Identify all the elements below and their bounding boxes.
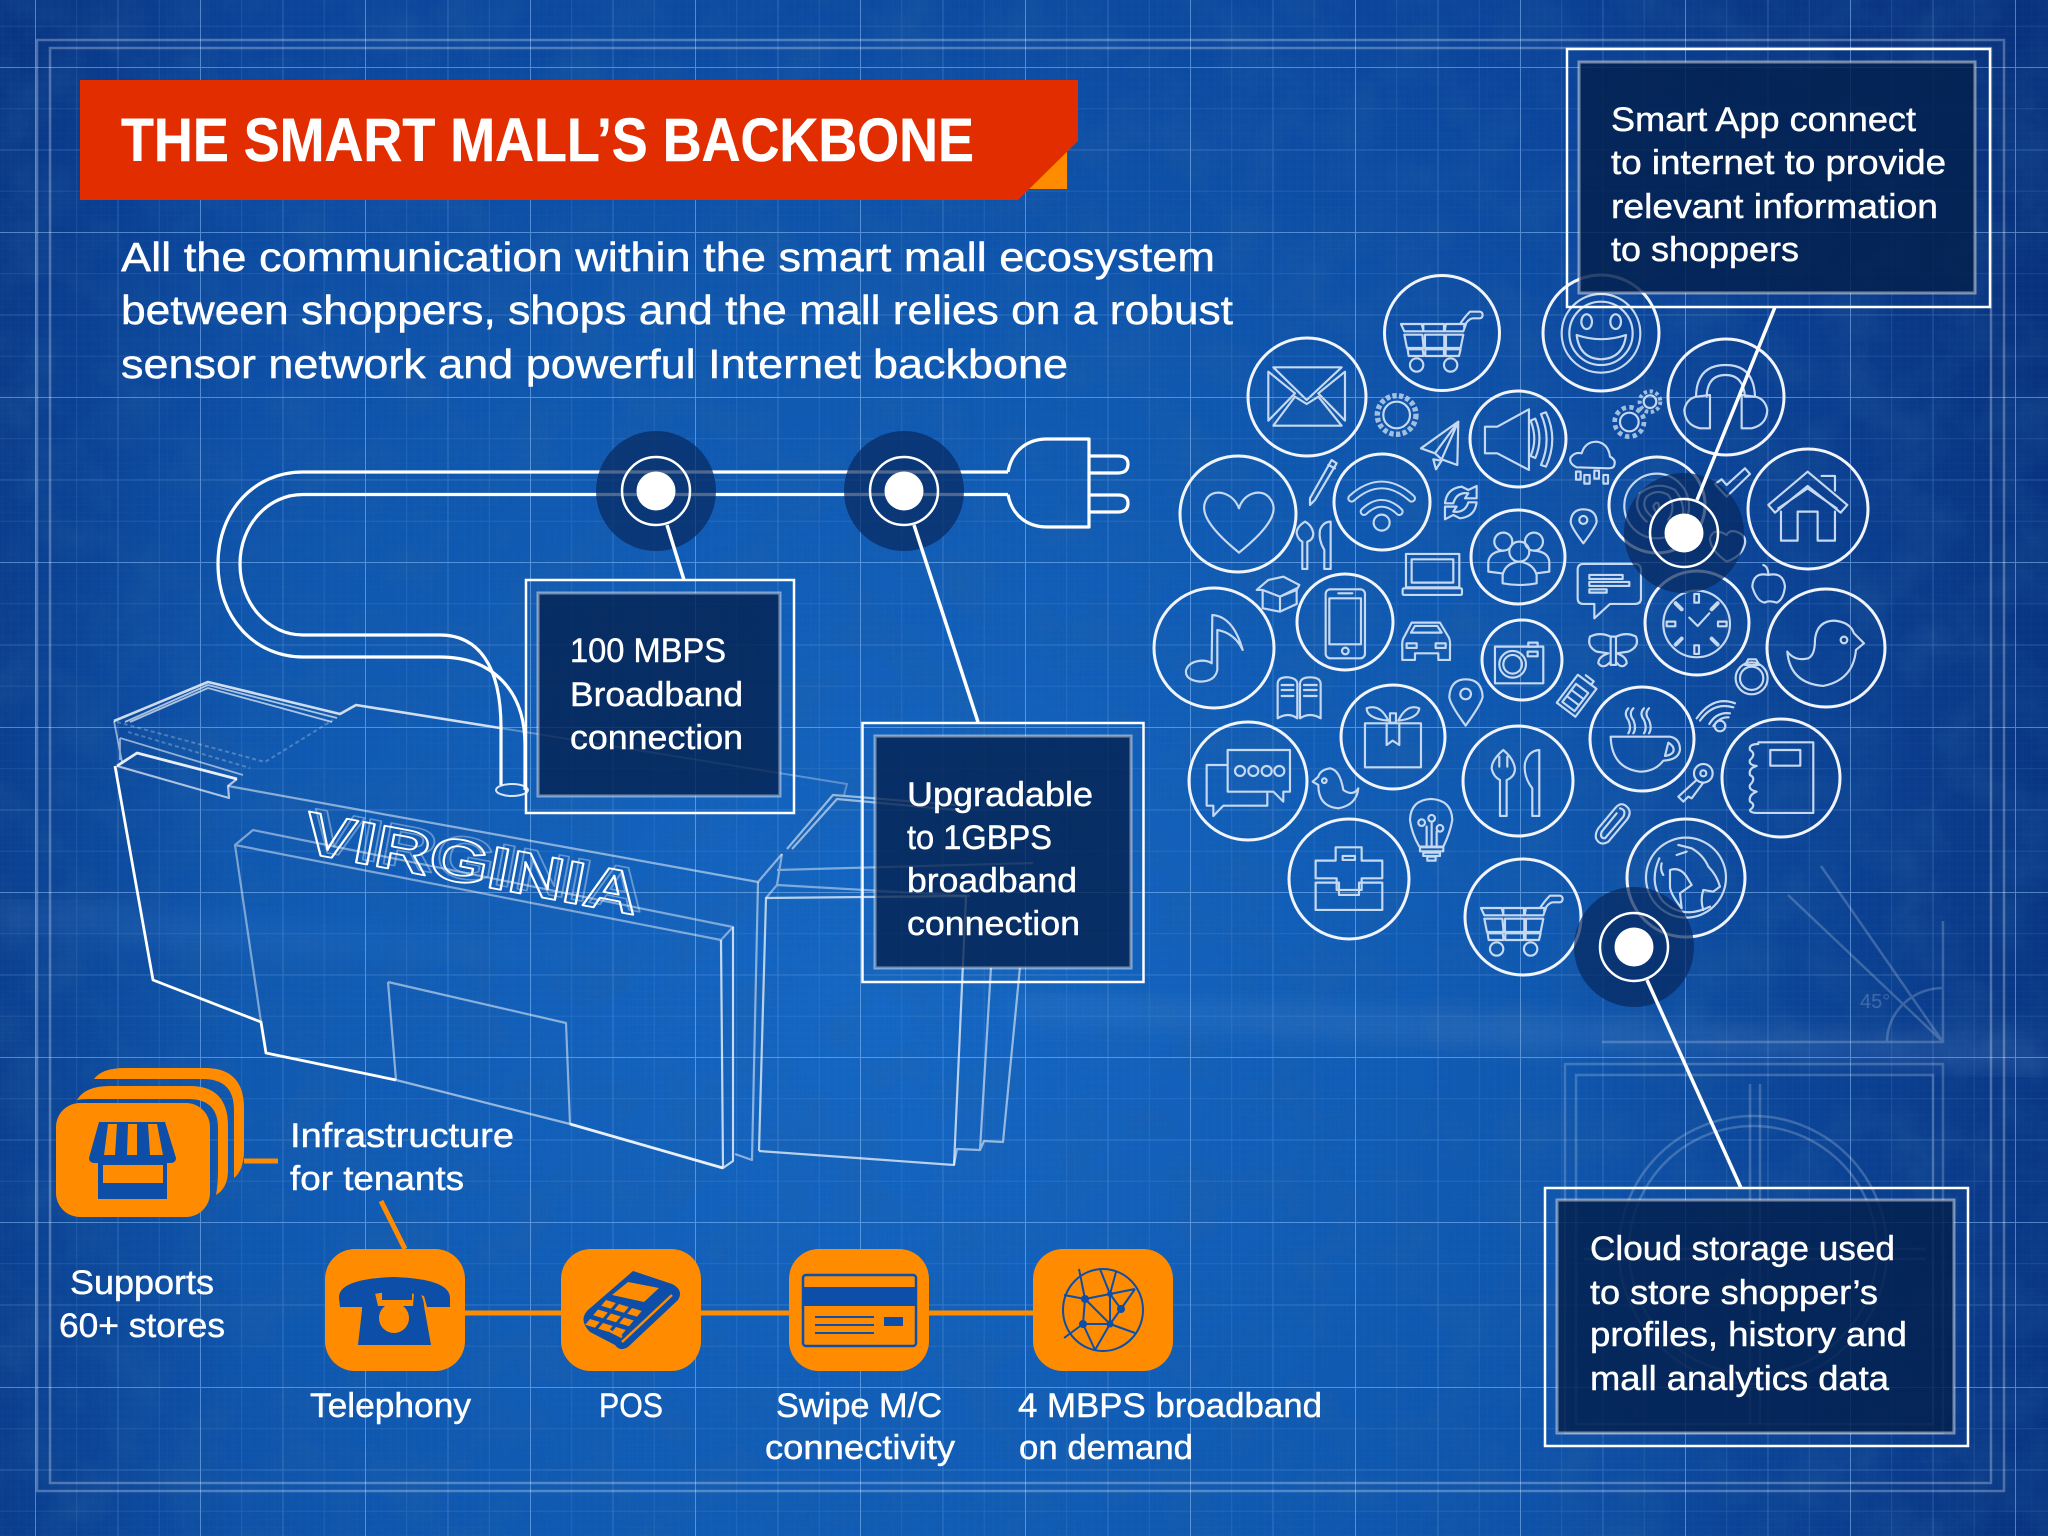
orange connector lines — [244, 1161, 1033, 1313]
faded blueprint drawing: protractor triangle and circle plan: 45° — [1860, 991, 1890, 1013]
label: supports 60+ stores: Supports — [70, 1264, 214, 1302]
label: swipe M/C connectivity — [765, 1387, 955, 1467]
icon: camera — [1495, 643, 1543, 683]
icon: speech bubble — [1578, 564, 1641, 618]
connection node: 100 MBPS — [596, 431, 716, 580]
faded blueprint drawing: protractor triangle and circle plan — [1565, 866, 1943, 1433]
callout: cloud storage — [1545, 1188, 1968, 1446]
icon: briefcase — [1316, 847, 1382, 910]
icon: heart — [1204, 493, 1274, 553]
icon: notebook — [1750, 742, 1813, 813]
label: telephony: Telephony — [310, 1387, 471, 1425]
icon: chat bubbles — [1207, 750, 1290, 816]
label: 4 MBPS broadband on demand: on demand — [1019, 1429, 1193, 1467]
callout: cloud storage: Cloud storage used — [1590, 1230, 1895, 1268]
icon: apple — [1752, 565, 1785, 603]
power cable and plug — [218, 439, 1128, 796]
icon: key — [1678, 764, 1713, 802]
icon tile: credit card — [789, 1249, 929, 1371]
connection node: smart app — [1624, 307, 1775, 593]
icon: fork and knife — [1492, 750, 1539, 816]
building sign: VIRGINIA: VIRGINIA — [305, 796, 652, 925]
icon: small cutlery — [1297, 522, 1331, 569]
icon: flower ring — [1377, 396, 1416, 434]
icon: rain cloud — [1570, 442, 1615, 484]
icon: laptop — [1403, 554, 1462, 595]
icon: shopping cart 2 — [1481, 896, 1563, 956]
small icons: butterfly, ring, battery, book, pin, wifi, bird, key, clip, bulb — [1278, 531, 1768, 861]
callout: cloud storage: mall analytics data — [1590, 1360, 1889, 1398]
icon: coffee cup — [1611, 708, 1680, 772]
icon: smartphone — [1326, 589, 1365, 658]
callout: upgradable to 1GBPS: connection — [907, 905, 1080, 943]
label: POS: POS — [599, 1387, 663, 1425]
connection node: cloud storage — [1574, 887, 1741, 1188]
intro text block — [121, 234, 1234, 387]
callout: smart app: Smart App connect — [1611, 101, 1917, 139]
callout: cloud storage: to store shopper’s — [1590, 1274, 1878, 1312]
callout: 100 MBPS broadband: 100 MBPS — [570, 632, 726, 670]
icon tile: telephone — [325, 1249, 465, 1371]
connection node: 1GBPS — [844, 431, 978, 722]
callout: smart app: to internet to provide — [1611, 144, 1946, 182]
label: infrastructure for tenants — [290, 1117, 514, 1198]
icon: wifi — [1352, 485, 1412, 531]
callout: 100 MBPS broadband: Broadband — [570, 676, 743, 714]
label: swipe M/C connectivity: Swipe M/C — [776, 1387, 942, 1425]
icon: parcel box — [1257, 577, 1299, 612]
callout: smart app: to shoppers — [1611, 231, 1799, 269]
icon: shopping cart — [1401, 312, 1483, 372]
icon: car — [1402, 623, 1450, 660]
icon tile: network globe — [1033, 1249, 1173, 1371]
icon: tilted small heart — [1710, 531, 1745, 562]
icon: small bird — [1313, 768, 1358, 808]
icon: house — [1768, 472, 1847, 541]
building sign: VIRGINIA: VIRGINIA — [299, 799, 645, 928]
wireframe mall building — [114, 682, 1033, 1168]
icon: small wifi — [1697, 701, 1735, 731]
callout: smart app — [1567, 49, 1990, 307]
large icon circles — [1154, 275, 1885, 975]
label: supports 60+ stores: 60+ stores — [59, 1307, 225, 1345]
icon: clock — [1663, 591, 1730, 657]
label: infrastructure for tenants: Infrastructure — [290, 1117, 514, 1155]
icon: paper plane — [1421, 422, 1458, 469]
callout: upgradable to 1GBPS: broadband — [907, 862, 1077, 900]
icon: gears — [1615, 391, 1660, 437]
label: swipe M/C connectivity: connectivity — [765, 1429, 955, 1467]
icon: battery — [1557, 671, 1599, 717]
icon: at sign spiral — [1624, 474, 1689, 538]
callout: upgradable to 1GBPS: Upgradable — [907, 776, 1093, 814]
callout: cloud storage: profiles, history and — [1590, 1316, 1907, 1354]
icon: sync arrows — [1445, 486, 1477, 519]
icon: pencil — [1310, 460, 1337, 505]
icon: ring — [1736, 659, 1768, 694]
icon: paper clip — [1596, 804, 1630, 844]
icon: check mark — [1715, 468, 1750, 497]
callout: 100 MBPS broadband: connection — [570, 719, 743, 757]
intro text block: sensor network and powerful Internet backbone — [121, 341, 1068, 387]
icon: smiley — [1562, 294, 1640, 373]
small icons: flower, plane, gears, cloud, pencil, cutlery, sync — [1297, 391, 1660, 569]
icon: map pin — [1571, 509, 1597, 543]
label: infrastructure for tenants: for tenants — [290, 1160, 464, 1198]
icon tile: POS terminal — [561, 1249, 701, 1371]
small icons: check, pin, heart, laptop, bubble, apple, box — [1257, 468, 1785, 660]
icon: envelope — [1268, 367, 1345, 426]
label: 4 MBPS broadband on demand — [1018, 1387, 1322, 1467]
icon: store stack — [56, 1068, 244, 1217]
icon: light bulb — [1410, 799, 1452, 861]
label: supports 60+ stores — [59, 1264, 225, 1345]
label: 4 MBPS broadband on demand: 4 MBPS broadband — [1018, 1387, 1322, 1425]
building sign: VIRGINIA — [299, 795, 652, 929]
icon: headphones — [1684, 365, 1767, 428]
icon: gift box — [1365, 707, 1421, 767]
icon: map pin 2 — [1449, 679, 1483, 726]
callout: smart app: relevant information — [1611, 188, 1938, 226]
icon: globe — [1646, 838, 1726, 918]
intro text block: between shoppers, shops and the mall relies on a robust — [121, 287, 1234, 333]
icon: music note — [1186, 615, 1243, 682]
callout: 100 MBPS broadband — [526, 580, 794, 813]
icon: speaker — [1485, 409, 1552, 470]
icon: twitter bird — [1787, 621, 1864, 686]
intro text block: All the communication within the smart mall ecosystem — [121, 234, 1215, 280]
icon: butterfly — [1589, 634, 1637, 666]
callout: upgradable to 1GBPS — [862, 723, 1144, 982]
icon: open book — [1278, 677, 1321, 718]
title banner — [80, 80, 1078, 200]
title banner: THE SMART MALL’S BACKBONE — [121, 106, 974, 174]
callout: upgradable to 1GBPS: to 1GBPS — [907, 819, 1052, 857]
icon: people group — [1488, 533, 1549, 585]
